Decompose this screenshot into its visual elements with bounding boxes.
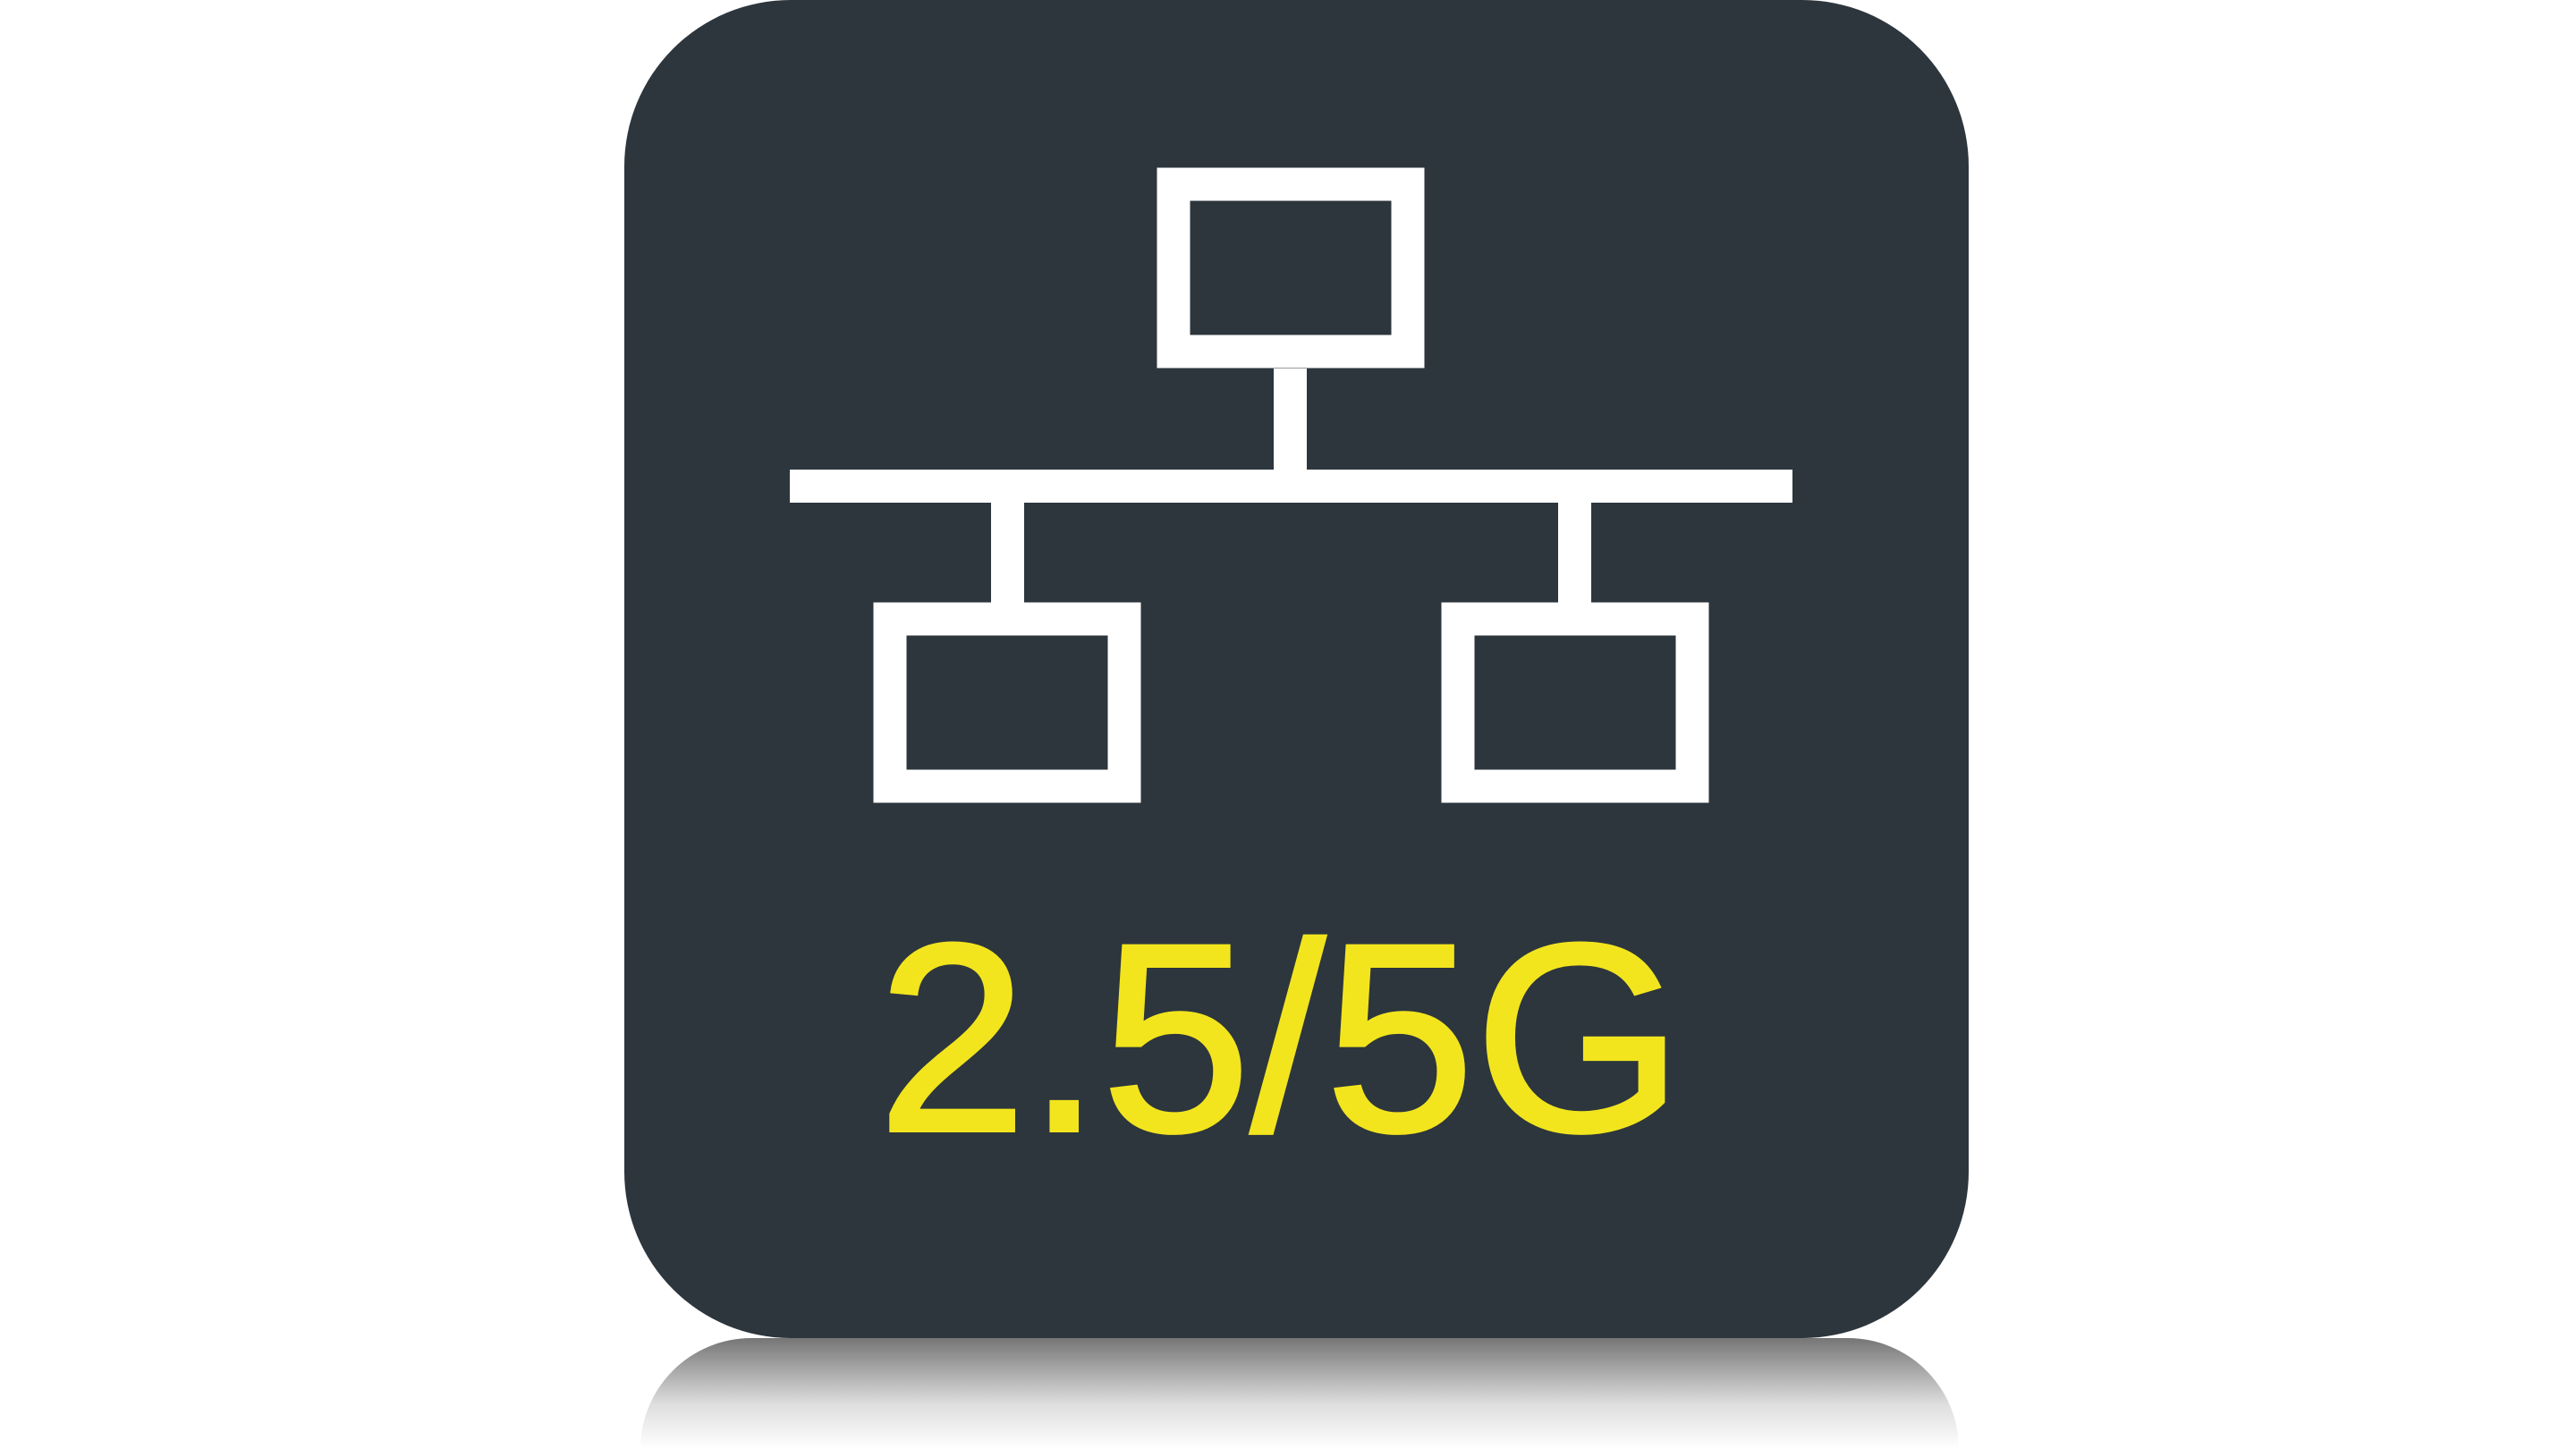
panel: dark rounded tile (624, 0, 1969, 1338)
icon: network topology (790, 168, 1792, 803)
label: 2.5/5G: 2.5/5G (877, 887, 1683, 1188)
reflection (640, 1338, 1959, 1449)
